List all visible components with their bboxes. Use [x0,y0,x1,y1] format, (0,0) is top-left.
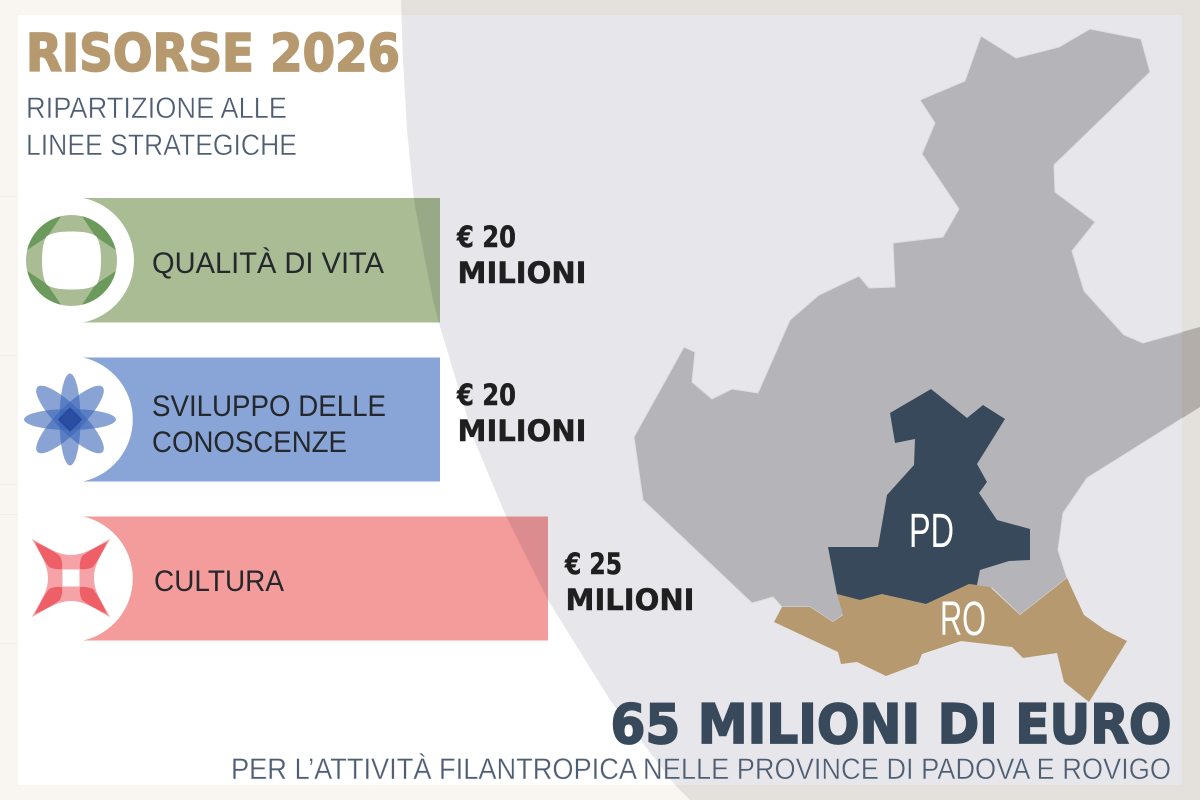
headline: total: 65 MILIONI DI EURO [610,693,1172,756]
panel: qualità di vita [26,198,440,322]
region: Veneto [634,29,1200,622]
amount: 25 milioni: € 25 [564,547,622,581]
bar: qualità di vita [83,198,440,322]
title: RISORSE 2026 [26,24,400,84]
subtitle: RIPARTIZIONE ALLE [26,92,287,125]
amount: 20 milioni: MILIONI [458,256,586,290]
subtitle [26,92,297,162]
panel: sviluppo delle conoscenze [24,358,440,482]
subtitle: LINEE STRATEGICHE [26,129,297,162]
amount: 25 milioni [564,547,694,617]
icon: green ring [26,215,117,306]
amount: 20 milioni [456,220,586,290]
label: cultura: CULTURA [154,565,284,598]
label: PD: PD [909,505,954,558]
label: sviluppo delle conoscenze: SVILUPPO DELLE [152,390,386,423]
amount: 25 milioni: MILIONI [566,583,694,617]
province: Rovigo [774,578,1127,702]
label: sviluppo delle conoscenze [152,390,386,459]
label: qualità di vita: QUALITÀ DI VITA [152,247,384,280]
label: RO: RO [940,593,986,646]
icon: red star [32,539,110,617]
amount: 20 milioni: € 20 [456,220,516,254]
amount: 20 milioni: MILIONI [458,414,586,448]
panel: cultura [32,516,548,640]
map of Veneto [634,29,1200,702]
amount: 20 milioni [456,378,586,448]
amount: 20 milioni: € 20 [456,378,516,412]
icon: blue flower [24,374,116,466]
bar: sviluppo delle conoscenze [83,358,440,482]
bar: cultura [83,516,548,640]
label: sviluppo delle conoscenze: CONOSCENZE [152,426,347,459]
panel: map background [401,0,1200,800]
province: Padova [828,389,1030,604]
